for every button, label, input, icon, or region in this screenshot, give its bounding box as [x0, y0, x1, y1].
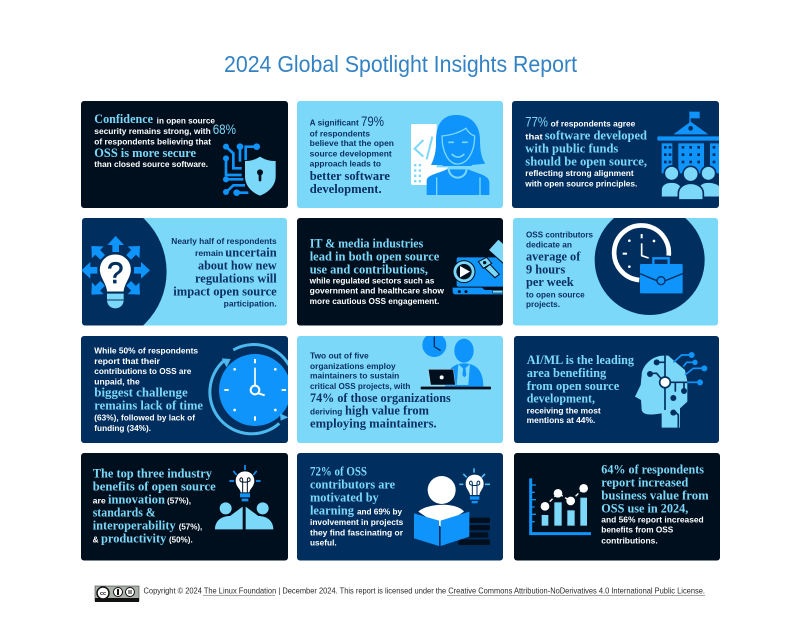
text block: 79%: [361, 114, 384, 129]
text block: better software: [310, 169, 390, 183]
panel: contributor motivation: [297, 453, 503, 560]
panel: AI and ML: [514, 336, 719, 443]
panel: nine hours per week: [513, 218, 718, 326]
icon: lightbulb question with arrows: [81, 236, 150, 308]
text block: &: [93, 536, 99, 545]
text block: development.: [310, 182, 382, 196]
text block: Confidence: [94, 112, 153, 126]
text block: motivated by: [310, 491, 379, 505]
text block: [171, 237, 277, 308]
text block: benefits from OSS: [601, 526, 674, 535]
text block: learning: [310, 503, 355, 517]
text block: and 56% report increased: [601, 515, 704, 524]
panel background: [81, 336, 288, 443]
icon: clock with cycle arrows: [210, 345, 294, 434]
text block: reflecting strong alignment: [525, 169, 634, 178]
text block: approach leads to: [310, 160, 381, 169]
text block: unpaid, the: [94, 377, 140, 386]
text block: [309, 237, 445, 306]
text block: While 50% of respondents: [94, 347, 198, 356]
text block: are: [93, 497, 106, 506]
text block: of respondents: [310, 129, 370, 138]
text block: useful.: [310, 539, 337, 548]
text block: area benefiting: [527, 366, 607, 380]
panel: business value: [514, 453, 720, 560]
panel: publicly funded software: [512, 101, 722, 208]
icon: reader with book and lightbulb: [414, 468, 490, 546]
title: 2024 Global Spotlight Insights Report: [224, 51, 578, 77]
footer copyright text: Copyright © 2024 The Linux Foundation | December 2024. This report is licensed under the Creative Commons Attribution-NoDerivatives 4.0 International Public License.: [144, 586, 705, 596]
icon: bar and line chart: [531, 478, 591, 534]
panel background: [297, 218, 503, 326]
text block: business value from: [601, 489, 709, 503]
text block: average of: [526, 249, 581, 263]
text block: [310, 465, 404, 548]
text block: with public funds: [525, 142, 618, 156]
text block: biggest challenge: [94, 386, 188, 400]
text block: report increased: [601, 476, 688, 490]
text block: contributions to OSS are: [94, 367, 192, 376]
text block: source development: [310, 149, 392, 158]
panel background: [513, 218, 718, 326]
text block: 74% of those organizations: [310, 391, 451, 405]
panel: industry benefits: [81, 453, 288, 560]
text block: to open source: [526, 290, 585, 299]
panel: IT and media industries: [297, 218, 505, 326]
text block: IT & media industries: [310, 237, 423, 251]
text block: security remains strong, with: [94, 127, 211, 136]
text block: remains lack of time: [94, 399, 203, 413]
text block: uncertain: [225, 246, 277, 260]
panel: biggest challenge: [81, 336, 294, 443]
text block: should be open source,: [525, 155, 647, 169]
panel: regulatory uncertainty: [81, 218, 287, 326]
text block: Nearly half of respondents: [171, 237, 277, 246]
text block: participation.: [224, 299, 277, 308]
text block: of respondents believing that: [94, 138, 211, 147]
panel background: [512, 101, 719, 208]
text block: [524, 115, 647, 189]
panel background: [514, 453, 720, 560]
text block: with open source principles.: [524, 180, 637, 189]
icon: video and megaphone: [453, 239, 505, 294]
panel: security confidence: [81, 101, 288, 208]
text block: government and healthcare show: [310, 287, 445, 296]
text block: OSS contributors: [526, 230, 593, 239]
text block: benefits of open source: [93, 480, 216, 494]
text block: while regulated sectors such as: [309, 276, 435, 285]
text block: 72% of OSS: [310, 465, 367, 479]
text block: funding (34%).: [94, 424, 151, 433]
icon: developer with code screen: [411, 115, 489, 195]
text block: The top three industry: [93, 467, 213, 481]
text block: of respondents agree: [551, 120, 636, 129]
text block: deriving: [310, 408, 342, 417]
text block: about how new: [198, 259, 277, 273]
icon: clock and briefcase: [594, 218, 705, 315]
text block: 68%: [213, 122, 236, 137]
text block: critical OSS projects, with: [310, 382, 410, 391]
text block: Two out of five: [310, 352, 369, 361]
panel background: [297, 453, 503, 560]
text block: (57%),: [167, 497, 191, 506]
panel background: [297, 336, 503, 443]
text block: A significant: [310, 118, 359, 127]
text block: they find fascinating or: [310, 528, 404, 537]
icon: AI head with circuits: [635, 352, 707, 428]
text block: (57%),: [179, 523, 202, 532]
text block: (63%), followed by lack of: [94, 414, 195, 423]
text block: that: [525, 133, 543, 142]
icon: two people with lightbulb: [215, 465, 273, 529]
text block: contributors are: [310, 478, 395, 492]
text block: maintainers to sustain: [310, 372, 399, 381]
panel: better software development: [297, 101, 503, 208]
text block: in open source: [157, 117, 215, 126]
text block: 77%: [525, 115, 548, 130]
text block: employing maintainers.: [310, 417, 437, 431]
text block: OSS use in 2024,: [601, 502, 688, 516]
text block: [310, 352, 451, 431]
text block: 64% of respondents: [601, 463, 704, 477]
panel background: [81, 453, 288, 560]
panel background: [514, 336, 719, 443]
icon: circuit shield: [223, 143, 276, 196]
text block: innovation: [108, 493, 165, 507]
text block: and 69% by: [357, 507, 402, 516]
text block: use and contributions,: [310, 263, 428, 277]
text block: impact open source: [173, 285, 277, 299]
text block: standards &: [93, 506, 156, 520]
text block: software developed: [545, 129, 647, 143]
text block: development,: [527, 392, 595, 406]
text block: more cautious OSS engagement.: [310, 297, 439, 306]
text block: remain: [195, 249, 223, 258]
text block: [310, 114, 394, 196]
text block: OSS is more secure: [94, 146, 196, 160]
text block: per week: [526, 275, 575, 289]
panel background: [82, 218, 287, 326]
text block: AI/ML is the leading: [527, 353, 635, 367]
text block: high value from: [345, 404, 429, 418]
text block: contributions.: [601, 536, 658, 545]
text block: [601, 463, 709, 545]
text block: mentions at 44%.: [527, 416, 595, 425]
text block: [94, 347, 203, 433]
text block: [527, 353, 635, 425]
panel: employing maintainers: [297, 333, 503, 443]
text block: regulations will: [195, 272, 277, 286]
icon: public building and people: [657, 112, 722, 200]
icon: lightbulb question with arrows: ?: [107, 257, 123, 290]
text block: [94, 112, 236, 169]
text block: [526, 230, 593, 309]
text block: productivity: [101, 532, 167, 546]
navy semicircle: [82, 218, 167, 326]
text block: interoperability: [93, 519, 176, 533]
text block: lead in both open source: [310, 250, 440, 264]
text block: report that their: [94, 357, 161, 366]
text block: 9 hours: [526, 263, 565, 277]
text block: (50%).: [169, 536, 193, 545]
panel background: [81, 101, 288, 208]
text block: organizations employ: [310, 362, 396, 371]
text block: [93, 467, 216, 546]
text block: believe that the open: [310, 139, 394, 148]
icon: maintainer at laptop with clock: [421, 333, 491, 389]
icon: creative commons badge: [95, 586, 139, 602]
text block: than closed source software.: [94, 160, 208, 169]
text block: from open source: [527, 379, 620, 393]
text block: involvement in projects: [310, 518, 404, 527]
text block: dedicate an: [526, 241, 572, 250]
icon: creative commons badge: cc: [100, 591, 106, 597]
text block: projects.: [526, 300, 560, 309]
panel background: [297, 101, 503, 208]
text block: receiving the most: [527, 406, 601, 415]
